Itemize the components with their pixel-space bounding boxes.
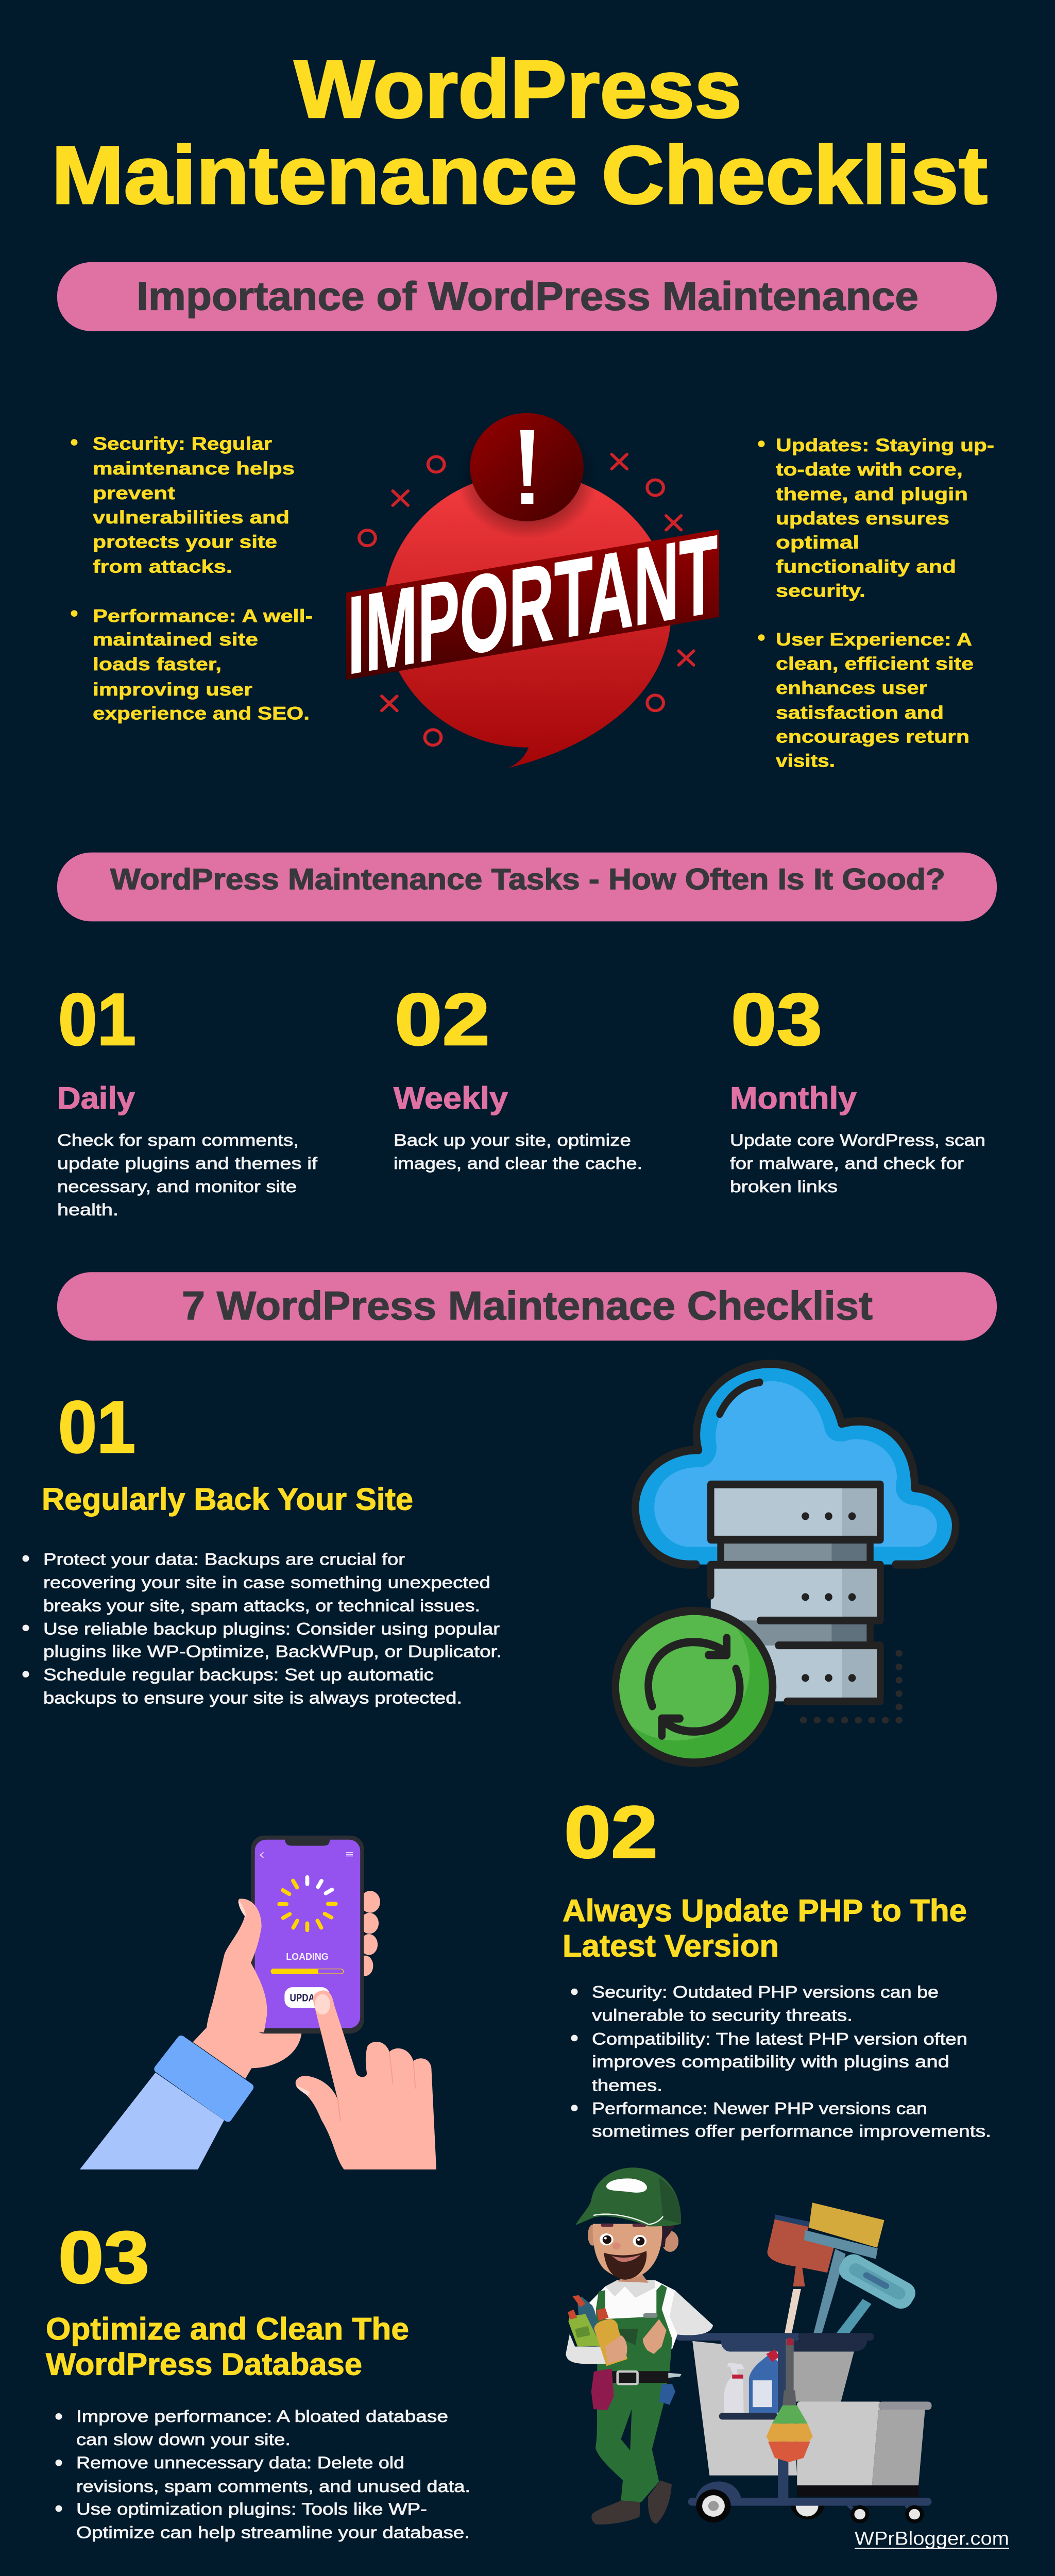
text block: updates and user experience: optimal bbox=[776, 532, 859, 553]
panel: step 01 backups: breaks your site, spam attacks, or technical issues. bbox=[43, 1596, 480, 1615]
text block: updates and user experience: clean, efficient site bbox=[776, 653, 974, 674]
panel: step 03 optimize database bbox=[46, 2216, 470, 2542]
panel: weekly: Back up your site, optimize bbox=[394, 1130, 631, 1149]
panel: step 02 update PHP: vulnerable to security threats. bbox=[592, 2006, 853, 2025]
panel: daily: Check for spam comments, bbox=[57, 1130, 299, 1149]
text block: security and performance: vulnerabilities and bbox=[93, 507, 290, 528]
text block: updates and user experience: updates ensures bbox=[776, 508, 949, 529]
text block: security and performance: improving user bbox=[93, 679, 252, 700]
text block: security and performance: loads faster, bbox=[93, 654, 222, 674]
section banner: importance bbox=[57, 262, 997, 331]
panel: step 03 optimize database: Optimize can help streamline your database. bbox=[76, 2523, 470, 2542]
panel: monthly: 03 bbox=[731, 978, 822, 1060]
panel: step 02 update PHP: Compatibility: The latest PHP version often bbox=[592, 2029, 967, 2048]
panel: daily: Daily bbox=[57, 1080, 135, 1115]
panel: step 03 optimize database: Use optimization plugins: Tools like WP- bbox=[76, 2499, 427, 2518]
section banner: tasks frequency: WordPress Maintenance Tasks - How Often Is It Good? bbox=[110, 863, 945, 896]
panel: step 01 backups bbox=[23, 1385, 502, 1707]
title: WordPress bbox=[294, 43, 742, 135]
panel: step 02 update PHP bbox=[563, 1791, 991, 2140]
text block: security and performance: maintenance helps bbox=[93, 458, 295, 479]
icon: important speech bubble: IMPORTANT bbox=[348, 512, 718, 698]
title bbox=[52, 43, 988, 221]
panel: weekly: Weekly bbox=[394, 1080, 508, 1115]
illustration: hands holding phone: LOADING bbox=[286, 1951, 329, 1962]
panel: daily: update plugins and themes if bbox=[57, 1154, 318, 1173]
section banner: checklist: 7 WordPress Maintenace Checklist bbox=[182, 1283, 873, 1328]
panel: weekly: 02 bbox=[395, 978, 490, 1060]
text block: security and performance bbox=[71, 434, 313, 724]
text block: updates and user experience: Updates: Staying up- bbox=[776, 435, 994, 455]
text block: security and performance: experience and SEO. bbox=[93, 703, 310, 724]
panel: step 01 backups: Schedule regular backups: Set up automatic bbox=[43, 1665, 434, 1684]
text block: security and performance: prevent bbox=[93, 483, 175, 503]
panel: step 03 optimize database: Optimize and Clean The bbox=[46, 2312, 409, 2346]
panel: step 03 optimize database: Remove unnecessary data: Delete old bbox=[76, 2453, 404, 2472]
panel: monthly bbox=[730, 978, 985, 1196]
panel: step 03 optimize database: WordPress Database bbox=[46, 2347, 362, 2381]
panel: daily bbox=[57, 978, 318, 1219]
section banner: checklist bbox=[57, 1272, 997, 1341]
illustration: hands holding phone bbox=[80, 1836, 436, 2170]
panel: step 01 backups: recovering your site in case something unexpected bbox=[43, 1573, 490, 1592]
text block: updates and user experience bbox=[758, 435, 994, 771]
panel: step 02 update PHP: sometimes offer performance improvements. bbox=[592, 2122, 991, 2140]
text block: updates and user experience: enhances user bbox=[776, 677, 927, 698]
panel: daily: health. bbox=[57, 1200, 118, 1219]
panel: step 03 optimize database: 03 bbox=[58, 2216, 149, 2298]
text block: security and performance: maintained site bbox=[93, 630, 258, 650]
text block: security and performance: Performance: A well- bbox=[93, 606, 313, 626]
panel: step 01 backups: Protect your data: Backups are crucial for bbox=[43, 1550, 405, 1569]
text block: updates and user experience: security. bbox=[776, 581, 865, 601]
title: Maintenance Checklist bbox=[52, 129, 988, 221]
panel: weekly: images, and clear the cache. bbox=[394, 1154, 642, 1173]
panel: daily: necessary, and monitor site bbox=[57, 1177, 297, 1196]
section banner: tasks frequency bbox=[57, 853, 997, 921]
panel: step 01 backups: 01 bbox=[58, 1385, 135, 1468]
panel: step 02 update PHP: Always Update PHP to The bbox=[563, 1893, 967, 1928]
text block: updates and user experience: satisfaction and bbox=[776, 702, 944, 723]
icon: cloud server backup bbox=[602, 1364, 956, 1762]
text block: updates and user experience: functionality and bbox=[776, 556, 956, 577]
icon: important speech bubble bbox=[346, 413, 719, 769]
illustration: cleaner with cart bbox=[566, 2167, 931, 2524]
panel: step 03 optimize database: Improve performance: A bloated database bbox=[76, 2406, 448, 2426]
panel: weekly bbox=[394, 978, 642, 1173]
text block: updates and user experience: visits. bbox=[776, 751, 835, 771]
text block: updates and user experience: theme, and plugin bbox=[776, 484, 968, 504]
panel: step 02 update PHP: Latest Version bbox=[563, 1928, 779, 1963]
panel: step 03 optimize database: revisions, spam comments, and unused data. bbox=[76, 2477, 470, 2496]
panel: daily: 01 bbox=[58, 978, 136, 1060]
illustration: hands holding phone: UPDA bbox=[290, 1993, 315, 2004]
panel: step 02 update PHP: 02 bbox=[564, 1791, 658, 1873]
footer: site credit: WPrBlogger.com bbox=[855, 2528, 1009, 2549]
section banner: importance: Importance of WordPress Maintenance bbox=[137, 274, 918, 318]
panel: step 01 backups: Regularly Back Your Site bbox=[42, 1482, 413, 1516]
panel: step 01 backups: backups to ensure your site is always protected. bbox=[43, 1688, 462, 1707]
panel: step 02 update PHP: themes. bbox=[592, 2076, 662, 2094]
text block: updates and user experience: encourages return bbox=[776, 726, 969, 747]
text block: updates and user experience: to-date with core, bbox=[776, 459, 963, 480]
text block: security and performance: from attacks. bbox=[93, 556, 232, 577]
panel: step 01 backups: plugins like WP-Optimize, BackWPup, or Duplicator. bbox=[43, 1642, 502, 1660]
panel: monthly: broken links bbox=[730, 1177, 838, 1196]
text block: security and performance: Security: Regular bbox=[93, 434, 272, 454]
panel: monthly: Update core WordPress, scan bbox=[730, 1130, 985, 1149]
panel: step 02 update PHP: Performance: Newer PHP versions can bbox=[592, 2099, 927, 2117]
text block: updates and user experience: User Experience: A bbox=[776, 630, 972, 650]
panel: step 03 optimize database: can slow down your site. bbox=[76, 2430, 291, 2449]
panel: monthly: Monthly bbox=[730, 1080, 857, 1115]
panel: step 02 update PHP: improves compatibility with plugins and bbox=[592, 2052, 949, 2071]
text block: security and performance: protects your site bbox=[93, 532, 277, 552]
panel: step 01 backups: Use reliable backup plugins: Consider using popular bbox=[43, 1619, 500, 1638]
panel: step 02 update PHP: Security: Outdated PHP versions can be bbox=[592, 1982, 939, 2002]
panel: monthly: for malware, and check for bbox=[730, 1154, 964, 1173]
